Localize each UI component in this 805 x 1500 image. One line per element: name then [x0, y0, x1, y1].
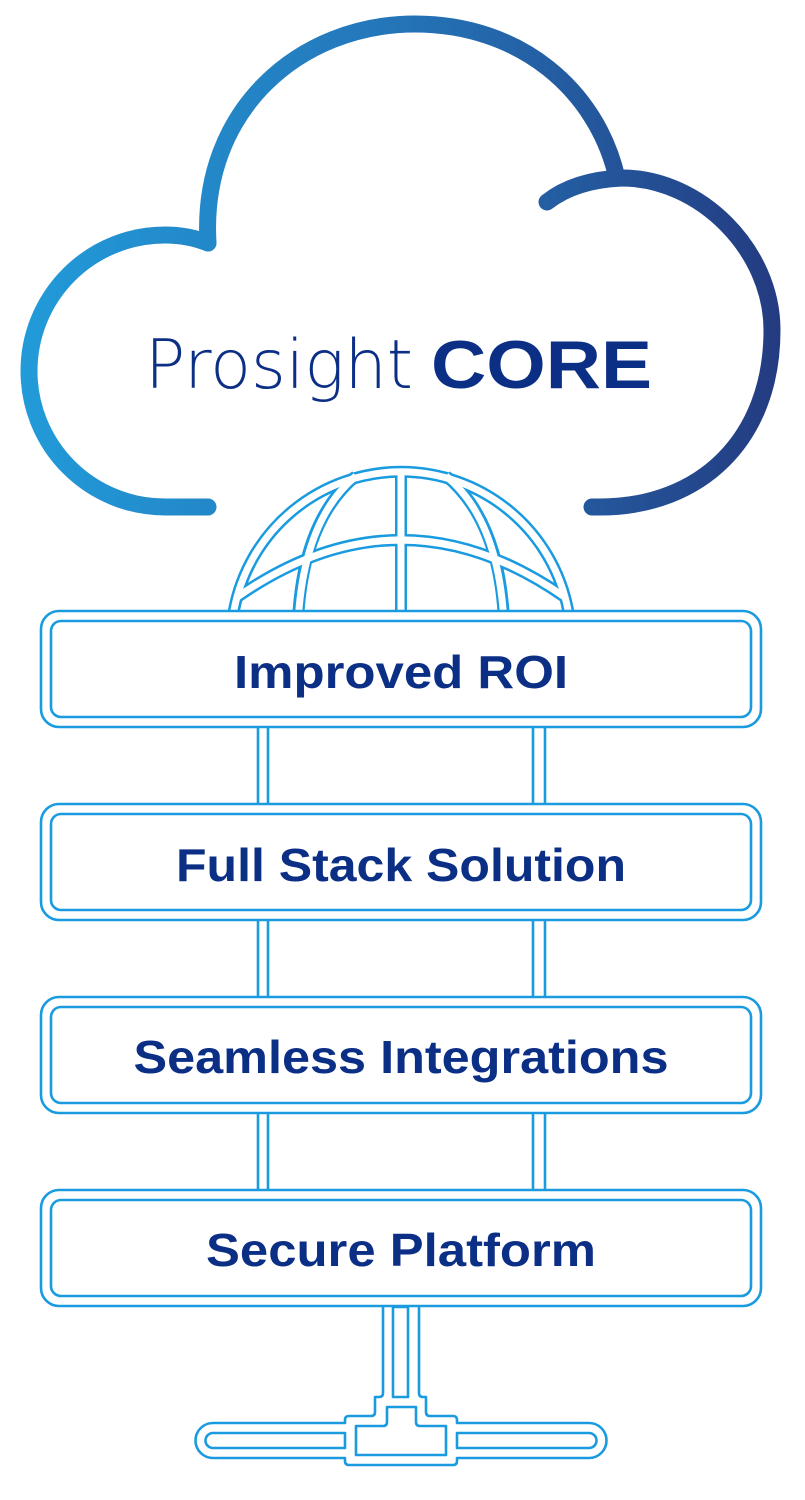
icon: network connector	[196, 1307, 606, 1465]
title: Prosight	[145, 326, 413, 405]
panel: Secure Platform	[41, 1190, 761, 1306]
panel: Improved ROI	[41, 611, 761, 727]
cloud outline	[29, 24, 772, 507]
connectors between panels	[258, 725, 545, 1192]
panel: Secure Platform: Secure Platform	[206, 1224, 596, 1276]
panel: Seamless Integrations: Seamless Integrations	[134, 1031, 668, 1083]
panel: Improved ROI: Improved ROI	[234, 646, 568, 698]
icon: globe	[233, 470, 569, 624]
panel: Full Stack Solution: Full Stack Solution	[176, 839, 626, 891]
panel: Full Stack Solution	[41, 804, 761, 920]
title	[145, 326, 652, 405]
panel: Seamless Integrations	[41, 997, 761, 1113]
title: CORE	[431, 327, 652, 403]
